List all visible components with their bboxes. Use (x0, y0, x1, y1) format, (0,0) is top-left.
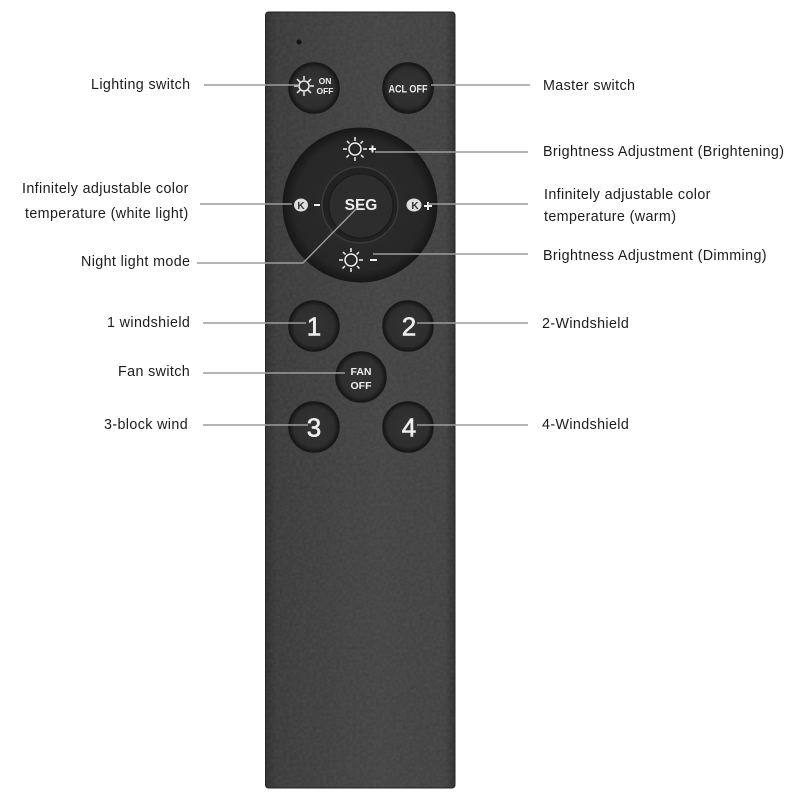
callout: warm temperature: Infinitely adjustable color (544, 187, 711, 203)
callout: fan switch: Fan switch (118, 364, 190, 380)
callout: 1 windshield: 1 windshield (107, 315, 190, 331)
callout: dimming: Brightness Adjustment (Dimming) (543, 248, 767, 264)
callout: lighting switch: Lighting switch (91, 77, 190, 93)
button: 4: 4 (402, 412, 416, 442)
icon: color temperature plus: K (411, 201, 419, 212)
button: master switch (383, 63, 433, 113)
remote control body (266, 12, 455, 788)
callout: 3-block wind: 3-block wind (104, 417, 188, 433)
icon: color temperature minus: K (297, 201, 305, 212)
button: 2 (383, 301, 433, 351)
button: 4 (383, 402, 433, 452)
button: lighting switch (289, 63, 339, 113)
button: SEG (322, 167, 398, 243)
icon: color temperature plus (406, 198, 432, 212)
button: lighting switch: OFF (316, 86, 334, 96)
callout: warm temperature (428, 187, 711, 225)
button: fan off: OFF (350, 380, 372, 392)
callout: warm temperature: temperature (warm) (544, 209, 676, 225)
callout: night light mode: Night light mode (81, 254, 190, 270)
button: SEG: SEG (345, 197, 377, 214)
button: 2: 2 (402, 312, 416, 342)
icon: color temperature minus (294, 198, 320, 212)
callout: brightening: Brightness Adjustment (Brightening) (543, 144, 784, 160)
callout: 2-windshield: 2-Windshield (542, 316, 629, 332)
callout: master switch: Master switch (543, 78, 635, 94)
button: fan off (336, 352, 386, 402)
callout: white light temperature: Infinitely adjustable color (22, 181, 189, 197)
indicator light (296, 40, 302, 44)
icon: brightness up (343, 137, 376, 161)
button: master switch: ACL OFF (388, 84, 428, 96)
callout: night light mode (81, 208, 357, 270)
callout: white light temperature (22, 181, 292, 222)
button: 3 (289, 402, 339, 452)
control dial (283, 128, 437, 282)
button: lighting switch: ON (319, 76, 331, 86)
icon: sun (294, 76, 314, 96)
callout: white light temperature: temperature (white light) (25, 206, 189, 222)
callout: 4-windshield: 4-Windshield (542, 417, 629, 433)
button: 1: 1 (307, 312, 321, 342)
button: fan off: FAN (350, 366, 372, 378)
button: 3: 3 (307, 412, 321, 442)
icon: brightness down (339, 248, 377, 272)
button: 1 (289, 301, 339, 351)
